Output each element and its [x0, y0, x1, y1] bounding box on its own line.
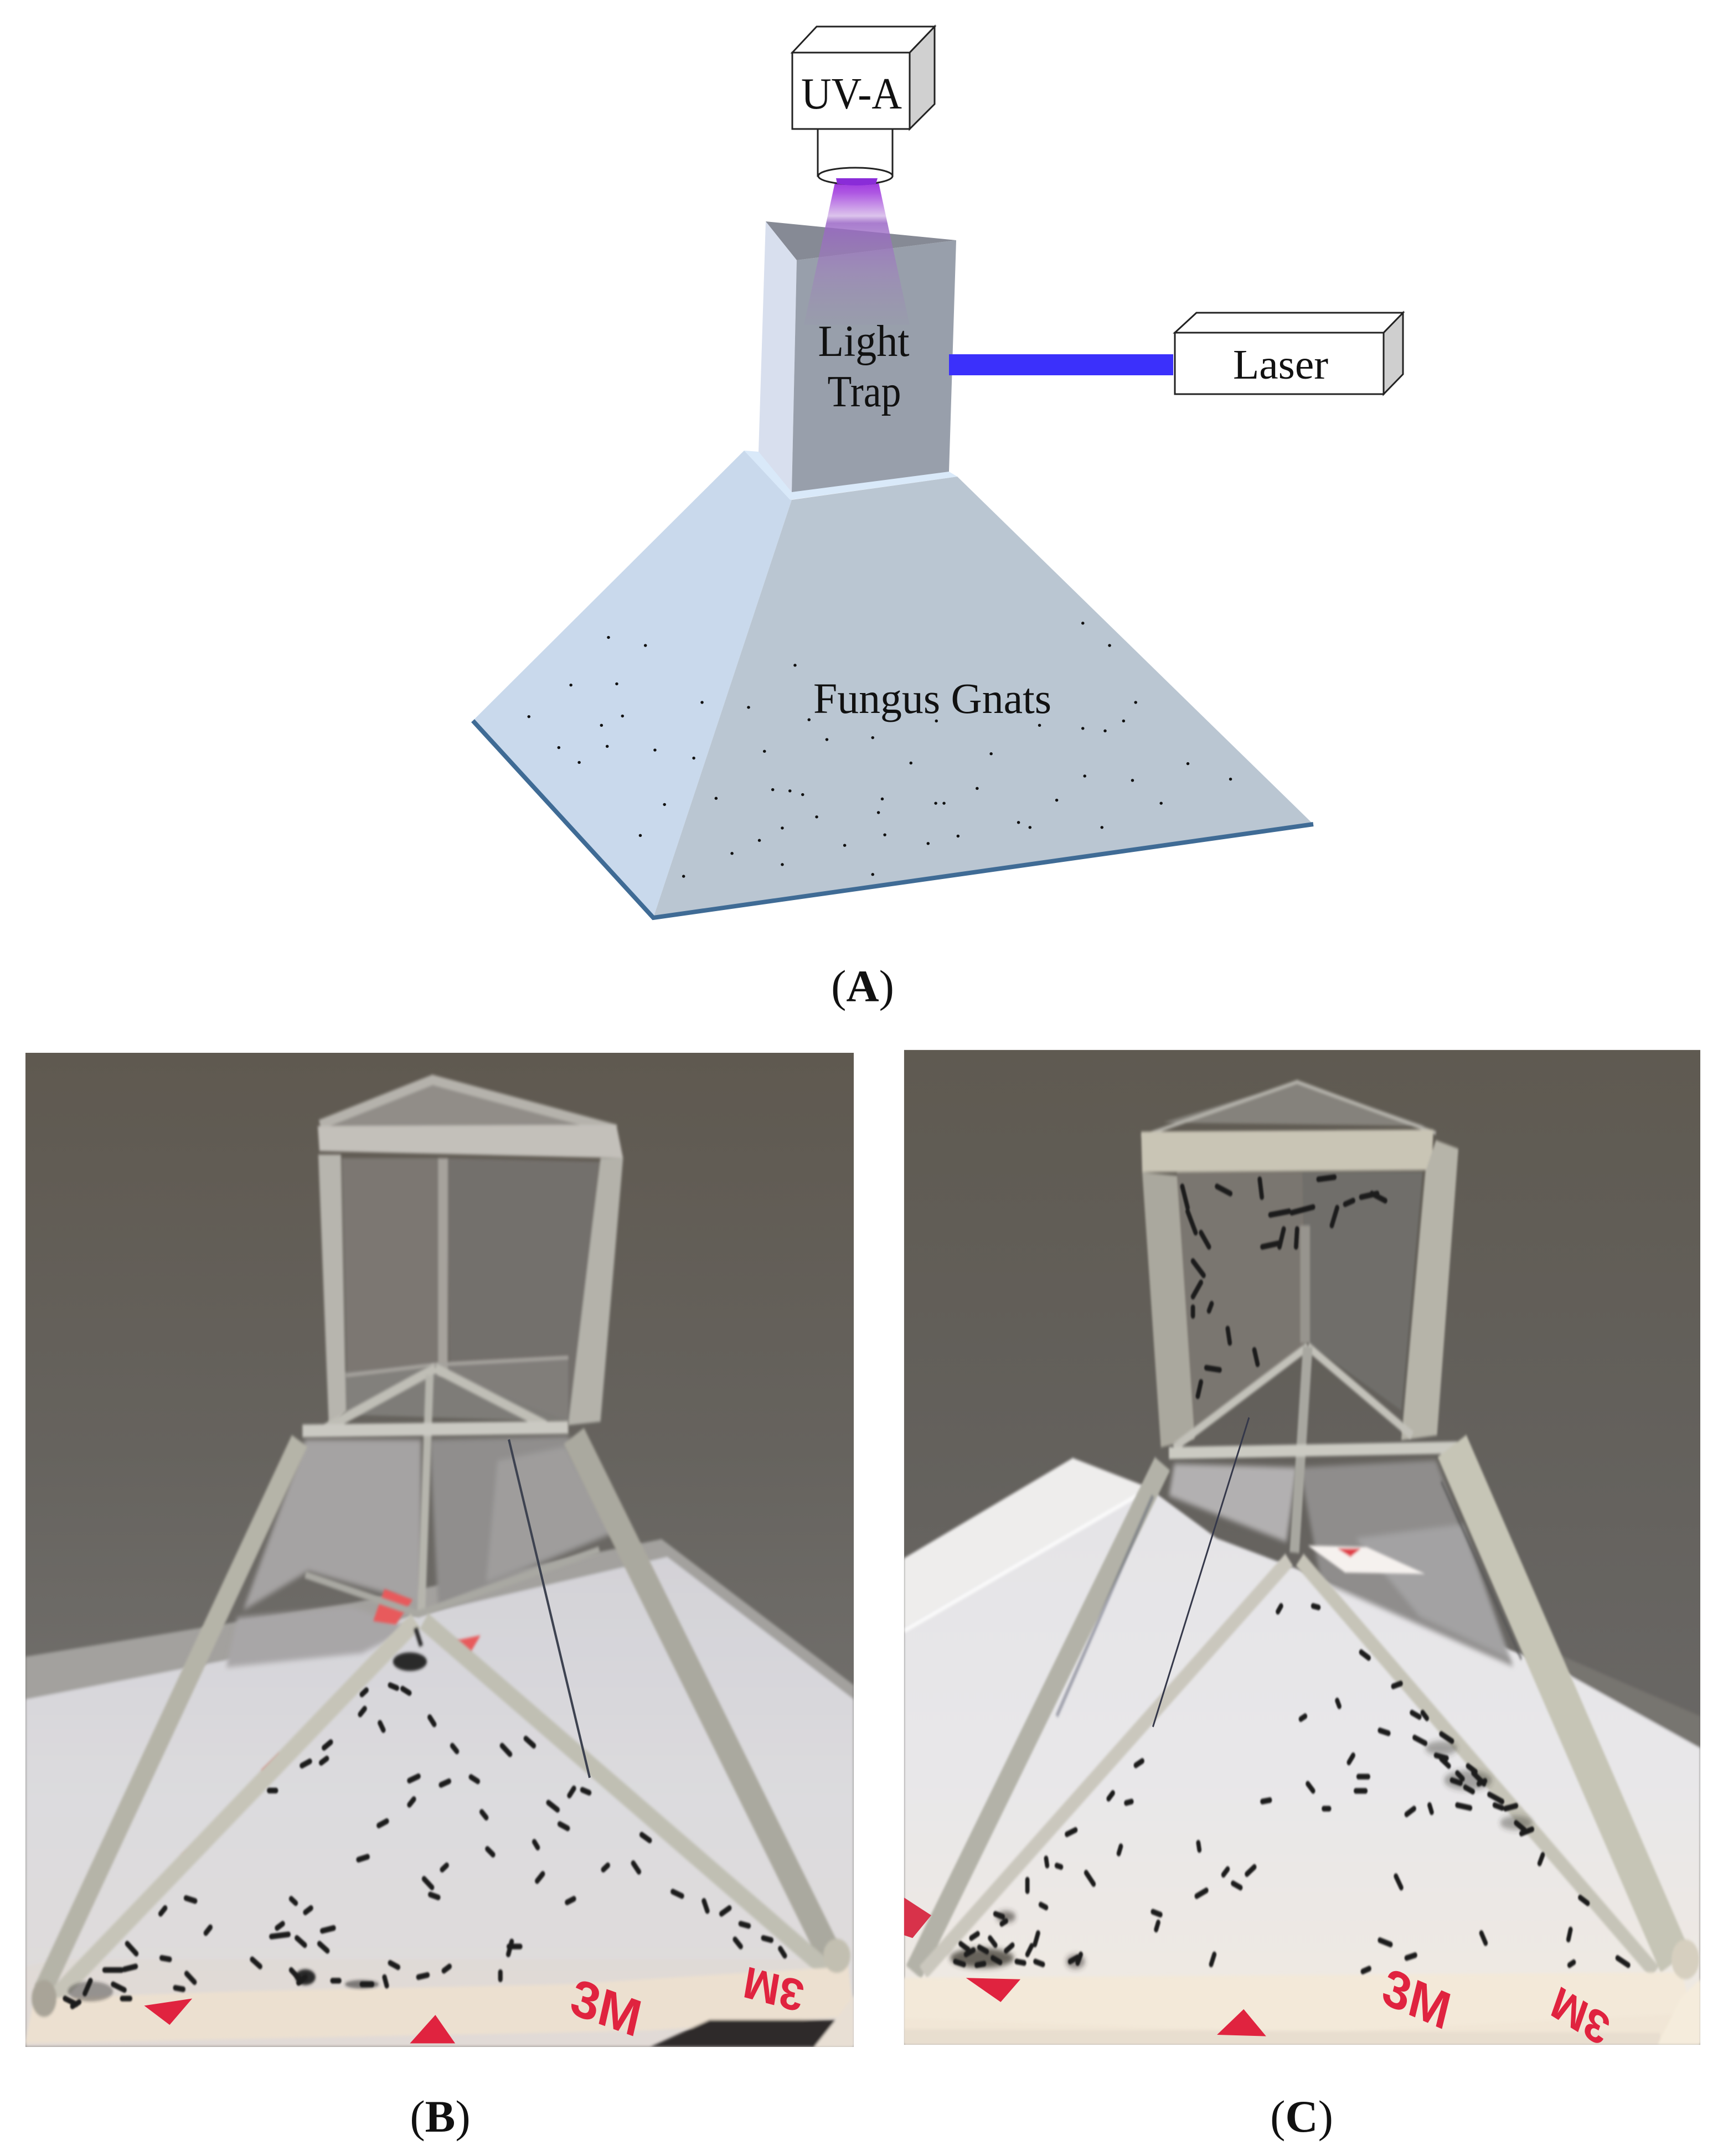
label: Light Trap: Trap — [827, 368, 901, 416]
table and white sheet — [25, 1539, 854, 2047]
fungus gnat dots — [527, 622, 1232, 878]
wall background — [904, 1050, 1700, 2045]
UV-A lamp — [792, 27, 935, 185]
label: Fungus Gnats: Fungus Gnats — [813, 674, 1051, 722]
label: Light Trap — [818, 317, 909, 416]
UV-A light beam — [804, 178, 910, 325]
dense gnat clusters — [950, 1741, 1532, 1969]
table and white sheet — [904, 1458, 1700, 2045]
red tape marks — [261, 1588, 482, 1771]
light trap chamber — [759, 221, 956, 492]
caption B: (B) — [410, 2091, 471, 2142]
3M logos on tape: 3M — [740, 1957, 807, 2021]
gnats in chamber — [1182, 1177, 1385, 1396]
label: Light Trap: Light — [818, 317, 909, 366]
3M logos on tape: 3M — [1546, 1976, 1616, 2055]
thin dark wire — [1153, 1418, 1249, 1727]
3M logos on tape — [904, 1898, 1616, 2055]
thin dark wire — [509, 1439, 590, 1778]
pyramid frame strips — [43, 1368, 835, 1998]
caption C: (C) — [1270, 2091, 1333, 2142]
upper trap chamber — [318, 1080, 623, 1431]
base tape — [904, 1940, 1700, 2045]
gnats on floor — [65, 1685, 785, 2007]
pyramid funnel — [473, 451, 1313, 918]
3M logos on tape — [144, 1957, 807, 2048]
3M logos on tape: 3M — [566, 1967, 647, 2048]
laser beam — [949, 354, 1173, 375]
acrylic panes — [1169, 1460, 1513, 1667]
3M logos on tape: 3M — [1377, 1957, 1456, 2041]
acrylic panes — [226, 1436, 616, 1667]
torn white tape behind apex — [1308, 1545, 1425, 1574]
label: UV-A: UV-A — [801, 70, 902, 118]
gnat cluster at apex — [68, 1628, 427, 2002]
panel A: light trap schematic — [473, 27, 1403, 918]
panel C: photo of trap with gnats in chamber — [904, 1050, 1700, 2055]
caption A: (A) — [831, 961, 894, 1011]
label: Laser: Laser — [1233, 342, 1328, 388]
base tape — [25, 1938, 854, 2047]
laser unit — [1175, 313, 1403, 394]
gnats on floor — [955, 1606, 1628, 1972]
pyramid frame strips — [914, 1346, 1675, 1972]
panel B: photo of trap with gnats on floor — [25, 1053, 854, 2048]
upper trap chamber — [1141, 1082, 1458, 1447]
wall background — [25, 1053, 854, 2047]
